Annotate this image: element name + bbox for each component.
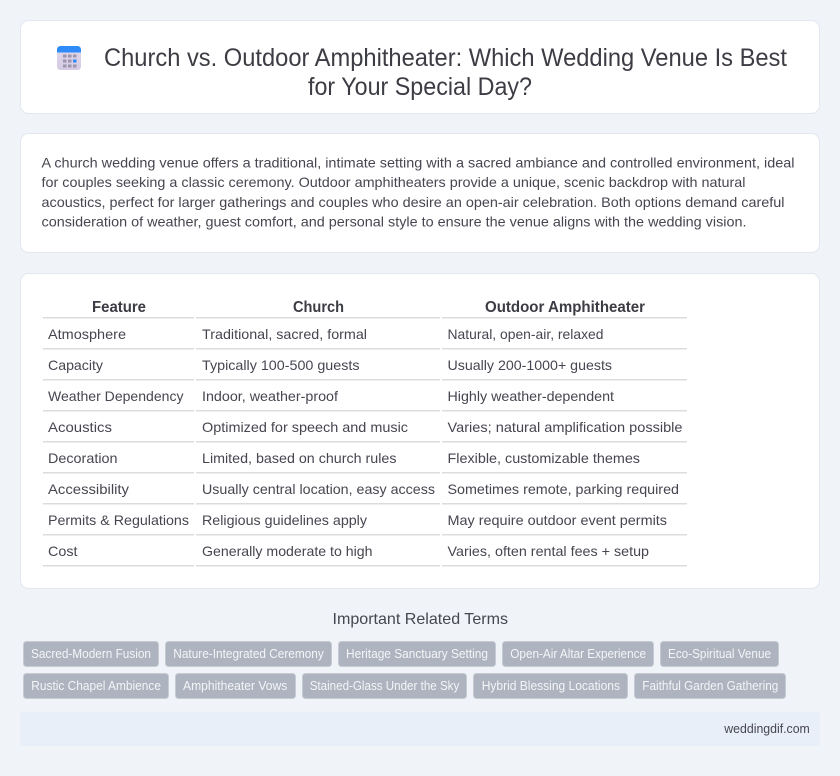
row: permits and regulations: Religious guidelines apply <box>202 512 367 528</box>
panel: introduction <box>20 134 820 252</box>
tag: Amphitheater Vows <box>183 678 288 693</box>
row: weather dependency <box>48 388 614 404</box>
row: decoration: Decoration <box>48 450 118 466</box>
intro paragraph: A church wedding venue offers a traditional, intimate setting with a sacred ambiance and controlled environment, ideal <box>42 154 794 170</box>
row: accessibility: Sometimes remote, parking required <box>448 481 679 497</box>
row: atmosphere: Traditional, sacred, formal <box>202 326 367 342</box>
tag: Nature-Integrated Ceremony <box>173 646 324 661</box>
footer source: weddingdif.com <box>723 721 810 736</box>
tag <box>634 674 786 698</box>
panel: comparison table <box>20 274 820 588</box>
title text: Church vs. Outdoor Amphitheater: Which Wedding Venue Is Best <box>104 44 787 72</box>
tag: Heritage Sanctuary Setting <box>346 646 488 661</box>
tag <box>338 642 496 666</box>
table column headers: Church <box>293 299 344 316</box>
intro paragraph: for couples seeking a classic ceremony. Outdoor amphitheaters provide a unique, scenic backdrop with natural <box>42 174 746 190</box>
row: capacity: Capacity <box>48 357 103 373</box>
row: cost: Generally moderate to high <box>202 543 372 559</box>
tag <box>502 642 654 666</box>
row: capacity <box>48 357 612 373</box>
tag: Faithful Garden Gathering <box>642 678 778 693</box>
icon: calendar <box>57 46 81 70</box>
tag: Stained-Glass Under the Sky <box>310 678 460 693</box>
row: cost: Cost <box>48 543 78 559</box>
row: acoustics: Acoustics <box>48 419 112 435</box>
title text: for Your Special Day? <box>308 73 532 101</box>
row: accessibility <box>48 481 679 497</box>
row: cost: Varies, often rental fees + setup <box>448 543 649 559</box>
row: decoration <box>48 450 640 466</box>
tag <box>474 674 628 698</box>
row: atmosphere: Atmosphere <box>48 326 126 342</box>
row: permits and regulations: May require outdoor event permits <box>448 512 667 528</box>
tag <box>176 674 296 698</box>
row: weather dependency: Weather Dependency <box>48 388 184 404</box>
row: decoration: Limited, based on church rules <box>202 450 396 466</box>
tag: Hybrid Blessing Locations <box>482 678 620 693</box>
row: weather dependency: Highly weather-dependent <box>448 388 614 404</box>
tag: Rustic Chapel Ambience <box>31 678 161 693</box>
footer bar <box>20 712 820 746</box>
tag: Open-Air Altar Experience <box>510 646 646 661</box>
row: permits and regulations: Permits & Regulations <box>48 512 189 528</box>
row: acoustics: Varies; natural amplification possible <box>448 419 683 435</box>
tag <box>24 674 168 698</box>
heading: important related terms: Important Related Terms <box>332 611 508 628</box>
tag <box>24 642 158 666</box>
table column headers: Outdoor Amphitheater <box>485 299 645 316</box>
row: accessibility: Usually central location, easy access <box>202 481 435 497</box>
intro paragraph: acoustics, perfect for larger gatherings and couples who desire an open-air celebration. Both options demand careful <box>42 194 784 210</box>
tags: related terms <box>24 642 786 698</box>
row: acoustics: Optimized for speech and music <box>202 419 408 435</box>
table column headers <box>92 299 645 316</box>
tag <box>166 642 332 666</box>
intro paragraph: consideration of weather, guest comfort, and personal style to ensure the venue aligns with the wedding vision. <box>42 214 746 230</box>
row: atmosphere <box>48 326 604 342</box>
row: capacity: Usually 200-1000+ guests <box>448 357 612 373</box>
row: decoration: Flexible, customizable themes <box>448 450 640 466</box>
row: weather dependency: Indoor, weather-proof <box>202 388 338 404</box>
tag <box>660 642 778 666</box>
row: accessibility: Accessibility <box>48 481 129 497</box>
row: acoustics <box>48 419 683 435</box>
row: cost <box>48 543 649 559</box>
panel: title header <box>20 20 820 114</box>
table column headers: Feature <box>92 299 146 316</box>
tag: Sacred-Modern Fusion <box>31 646 151 661</box>
row: atmosphere: Natural, open-air, relaxed <box>448 326 604 342</box>
tag <box>302 674 466 698</box>
tag: Eco-Spiritual Venue <box>668 646 771 661</box>
row: permits and regulations <box>48 512 667 528</box>
row: capacity: Typically 100-500 guests <box>202 357 360 373</box>
